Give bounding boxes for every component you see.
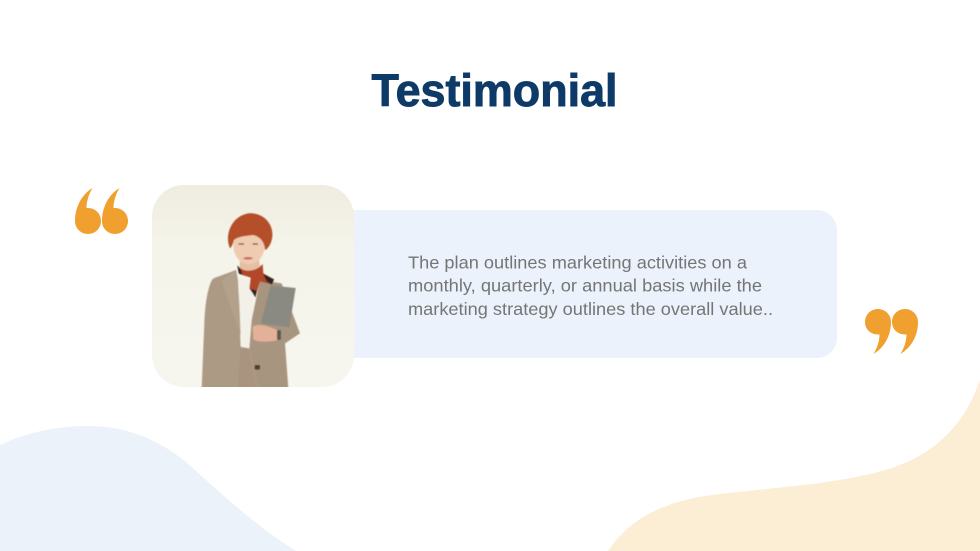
- blazer left side: [202, 270, 241, 388]
- trousers: [237, 347, 257, 388]
- watch: [277, 330, 281, 340]
- testimonial text: marketing strategy outlines the overall value..: [408, 299, 773, 319]
- testimonial text: monthly, quarterly, or annual basis while the: [408, 276, 762, 296]
- testimonial text: The plan outlines marketing activities on a: [408, 252, 747, 272]
- hand: [253, 325, 278, 342]
- laptop: [261, 285, 296, 327]
- lips: [243, 257, 253, 260]
- background blob: blue: [0, 426, 296, 551]
- blazer lapel: [238, 295, 241, 334]
- button: [255, 365, 260, 370]
- photo wall background: [152, 185, 354, 387]
- icon: closing quote mark: [865, 309, 918, 354]
- photo: woman holding a laptop: [152, 185, 354, 388]
- icon: opening quote mark: [75, 188, 128, 234]
- face: [232, 235, 266, 264]
- blazer right side: [249, 280, 300, 388]
- testimonial text: [408, 252, 773, 319]
- scarf: [237, 264, 274, 297]
- title: Testimonial: [372, 65, 618, 116]
- white top: [249, 278, 255, 322]
- person: [202, 213, 300, 388]
- scarf dark edges: [237, 265, 274, 297]
- neck: [239, 260, 260, 271]
- eyes: [239, 243, 258, 245]
- background blob: cream: [608, 380, 980, 551]
- panel: quote card: [300, 210, 837, 358]
- hair: [228, 213, 272, 250]
